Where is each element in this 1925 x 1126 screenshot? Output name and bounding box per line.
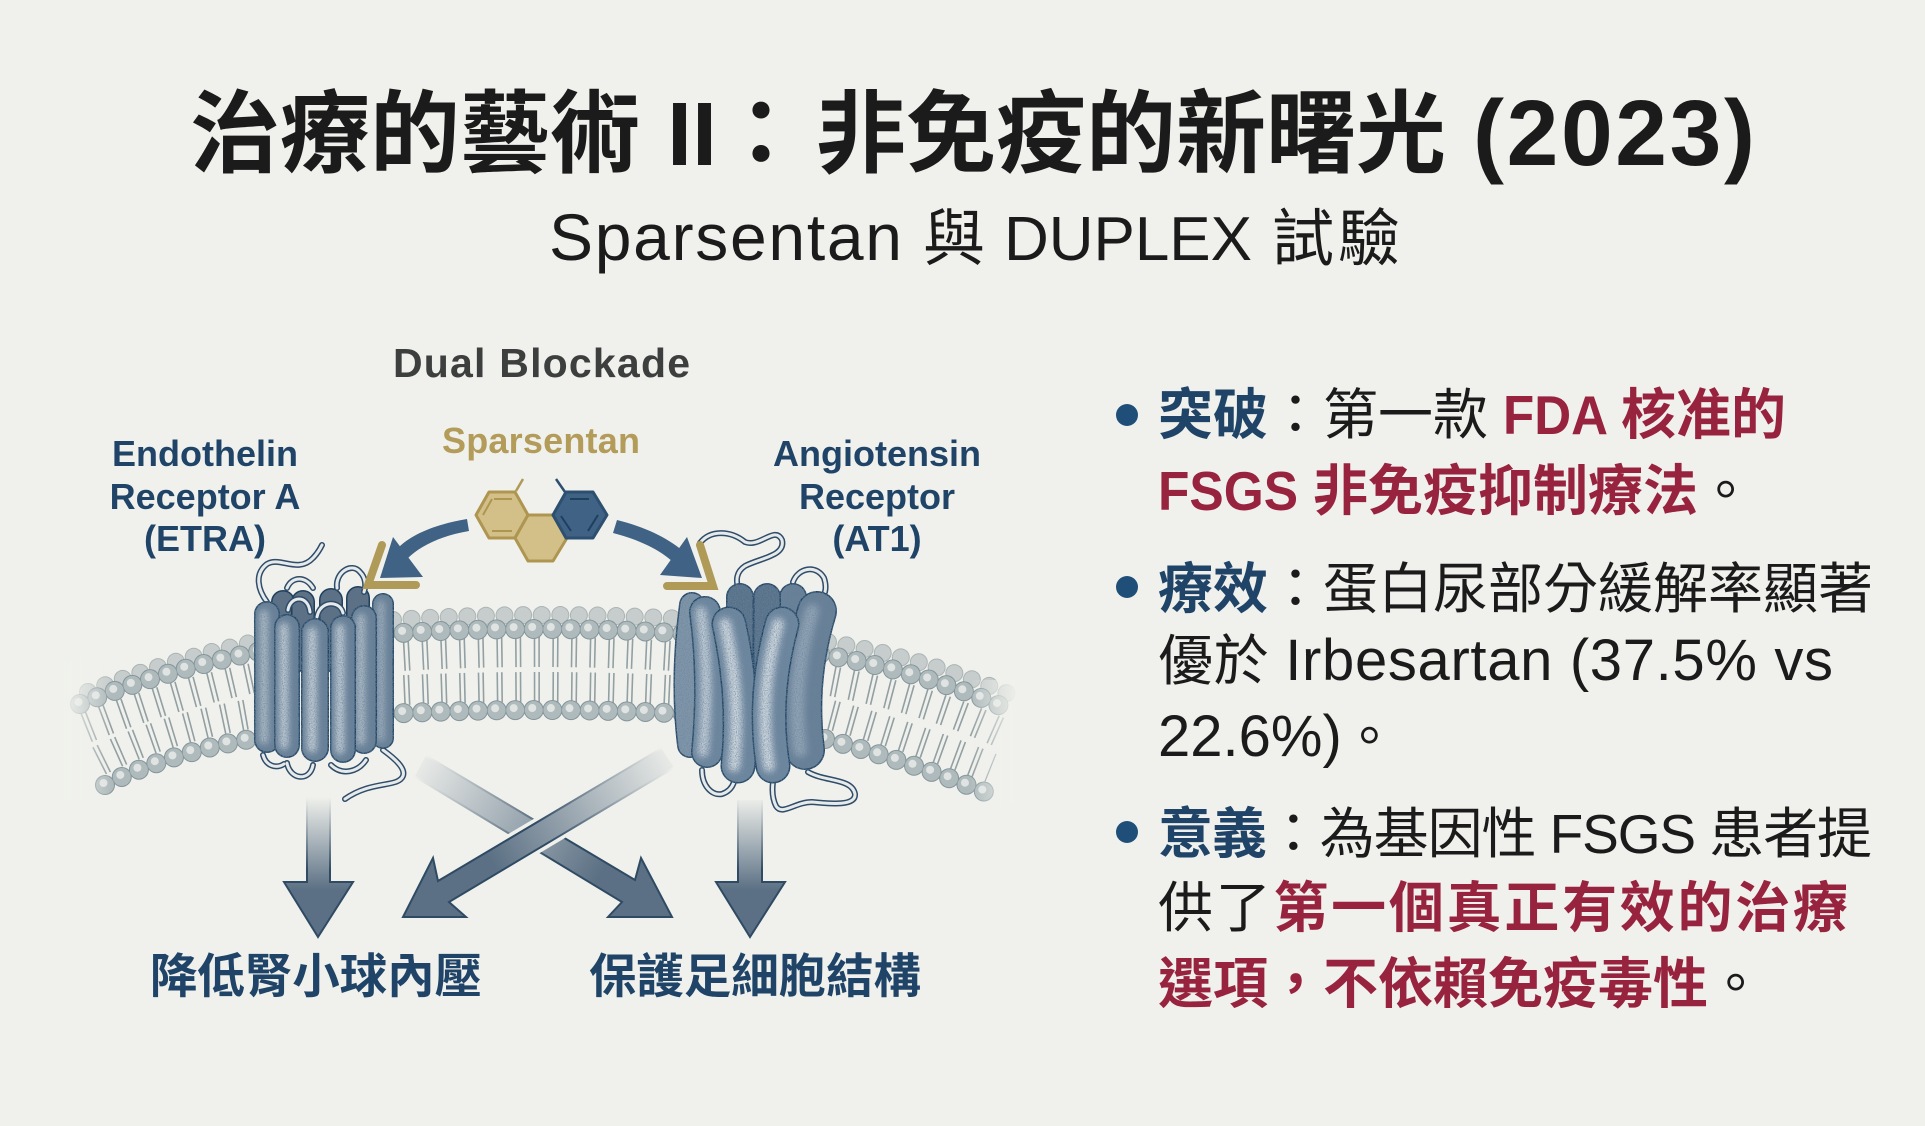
title: (2023) xyxy=(1473,81,1755,185)
bullet point: significance xyxy=(1116,803,1872,1015)
ETRA bottom loops xyxy=(263,750,403,799)
bullet point: efficacy xyxy=(1116,558,1873,769)
bullet point: significance: 供了第一個真正有效的治療 xyxy=(1158,877,1848,939)
bullet point: breakthrough: 突破：第一款 xyxy=(1158,384,1488,446)
bullet point: efficacy: 療效：蛋白尿部分緩解率顯著 xyxy=(1158,558,1873,620)
arrow: AT1 to pressure xyxy=(403,748,675,917)
arrow: molecule to ETRA xyxy=(380,519,469,578)
icon: AT1 receptor xyxy=(686,533,855,810)
bullet point: significance: 意義：為基因性 FSGS 患者提 xyxy=(1158,803,1872,865)
label: Endothelin Receptor A: (ETRA) xyxy=(144,518,266,559)
membrane rear head row xyxy=(88,615,1013,696)
title: II xyxy=(667,85,717,185)
arrow: ETRA to pressure xyxy=(284,797,353,937)
subtitle xyxy=(549,200,1400,274)
title: ： xyxy=(716,85,806,185)
bullet point: breakthrough: 核准的 xyxy=(1621,384,1786,446)
icon: lipid bilayer membrane xyxy=(62,615,1020,805)
bullet point: efficacy: 22.6%)。 xyxy=(1158,704,1397,769)
icon: ETRA receptor xyxy=(259,545,403,799)
arrow: AT1 to podocyte xyxy=(716,800,785,937)
ETRA front helices xyxy=(264,604,383,750)
label: Sparsentan: Sparsentan xyxy=(442,420,640,461)
label: protect podocyte structure: 保護足細胞結構 xyxy=(589,951,921,1004)
ETRA back helices xyxy=(283,598,358,660)
icon: Sparsentan molecule xyxy=(476,479,607,561)
bullet point: efficacy: 優於 Irbesartan (37.5% vs xyxy=(1158,628,1833,693)
AT1 helices xyxy=(686,597,817,766)
panel: mechanism diagram xyxy=(62,340,1020,1004)
membrane tails xyxy=(86,652,999,768)
arrow: ETRA to podocyte xyxy=(414,755,672,917)
icon: gold binding site right xyxy=(667,545,713,586)
label: lower glomerular pressure: 降低腎小球內壓 xyxy=(150,951,482,1004)
label: Angiotensin Receptor: Receptor xyxy=(799,476,955,517)
ETRA top loops xyxy=(259,545,365,617)
title: 治療的藝術 xyxy=(190,85,640,185)
title: 非免疫的新曙光 xyxy=(816,85,1446,185)
subtitle: Sparsentan xyxy=(549,200,902,274)
bullet point: breakthrough xyxy=(1116,384,1786,522)
bullet point: breakthrough: 非免疫抑制療法。 xyxy=(1313,460,1753,522)
arrow: molecule to AT1 xyxy=(613,520,702,578)
bullet point: breakthrough: FDA xyxy=(1503,384,1608,446)
AT1 loops xyxy=(700,533,855,810)
bullet point: breakthrough: FSGS xyxy=(1158,460,1298,522)
icon: gold binding site left xyxy=(368,545,416,585)
label: Angiotensin Receptor: (AT1) xyxy=(832,518,922,559)
label: Angiotensin Receptor xyxy=(773,433,981,559)
bullet point: significance: 選項，不依賴免疫毒性。 xyxy=(1158,953,1763,1015)
subtitle: 試驗 xyxy=(1272,205,1400,274)
diagram heading: Dual Blockade: Dual Blockade xyxy=(393,340,690,386)
membrane front head rows xyxy=(78,627,1005,792)
title xyxy=(190,81,1755,185)
label: Angiotensin Receptor: Angiotensin xyxy=(773,433,981,474)
label: Endothelin Receptor A: Endothelin xyxy=(112,433,298,474)
subtitle: DUPLEX xyxy=(1004,205,1252,274)
subtitle: 與 xyxy=(923,205,985,274)
label: Endothelin Receptor A xyxy=(110,433,300,559)
panel: key points xyxy=(1116,384,1873,1015)
label: Endothelin Receptor A: Receptor A xyxy=(110,476,300,517)
